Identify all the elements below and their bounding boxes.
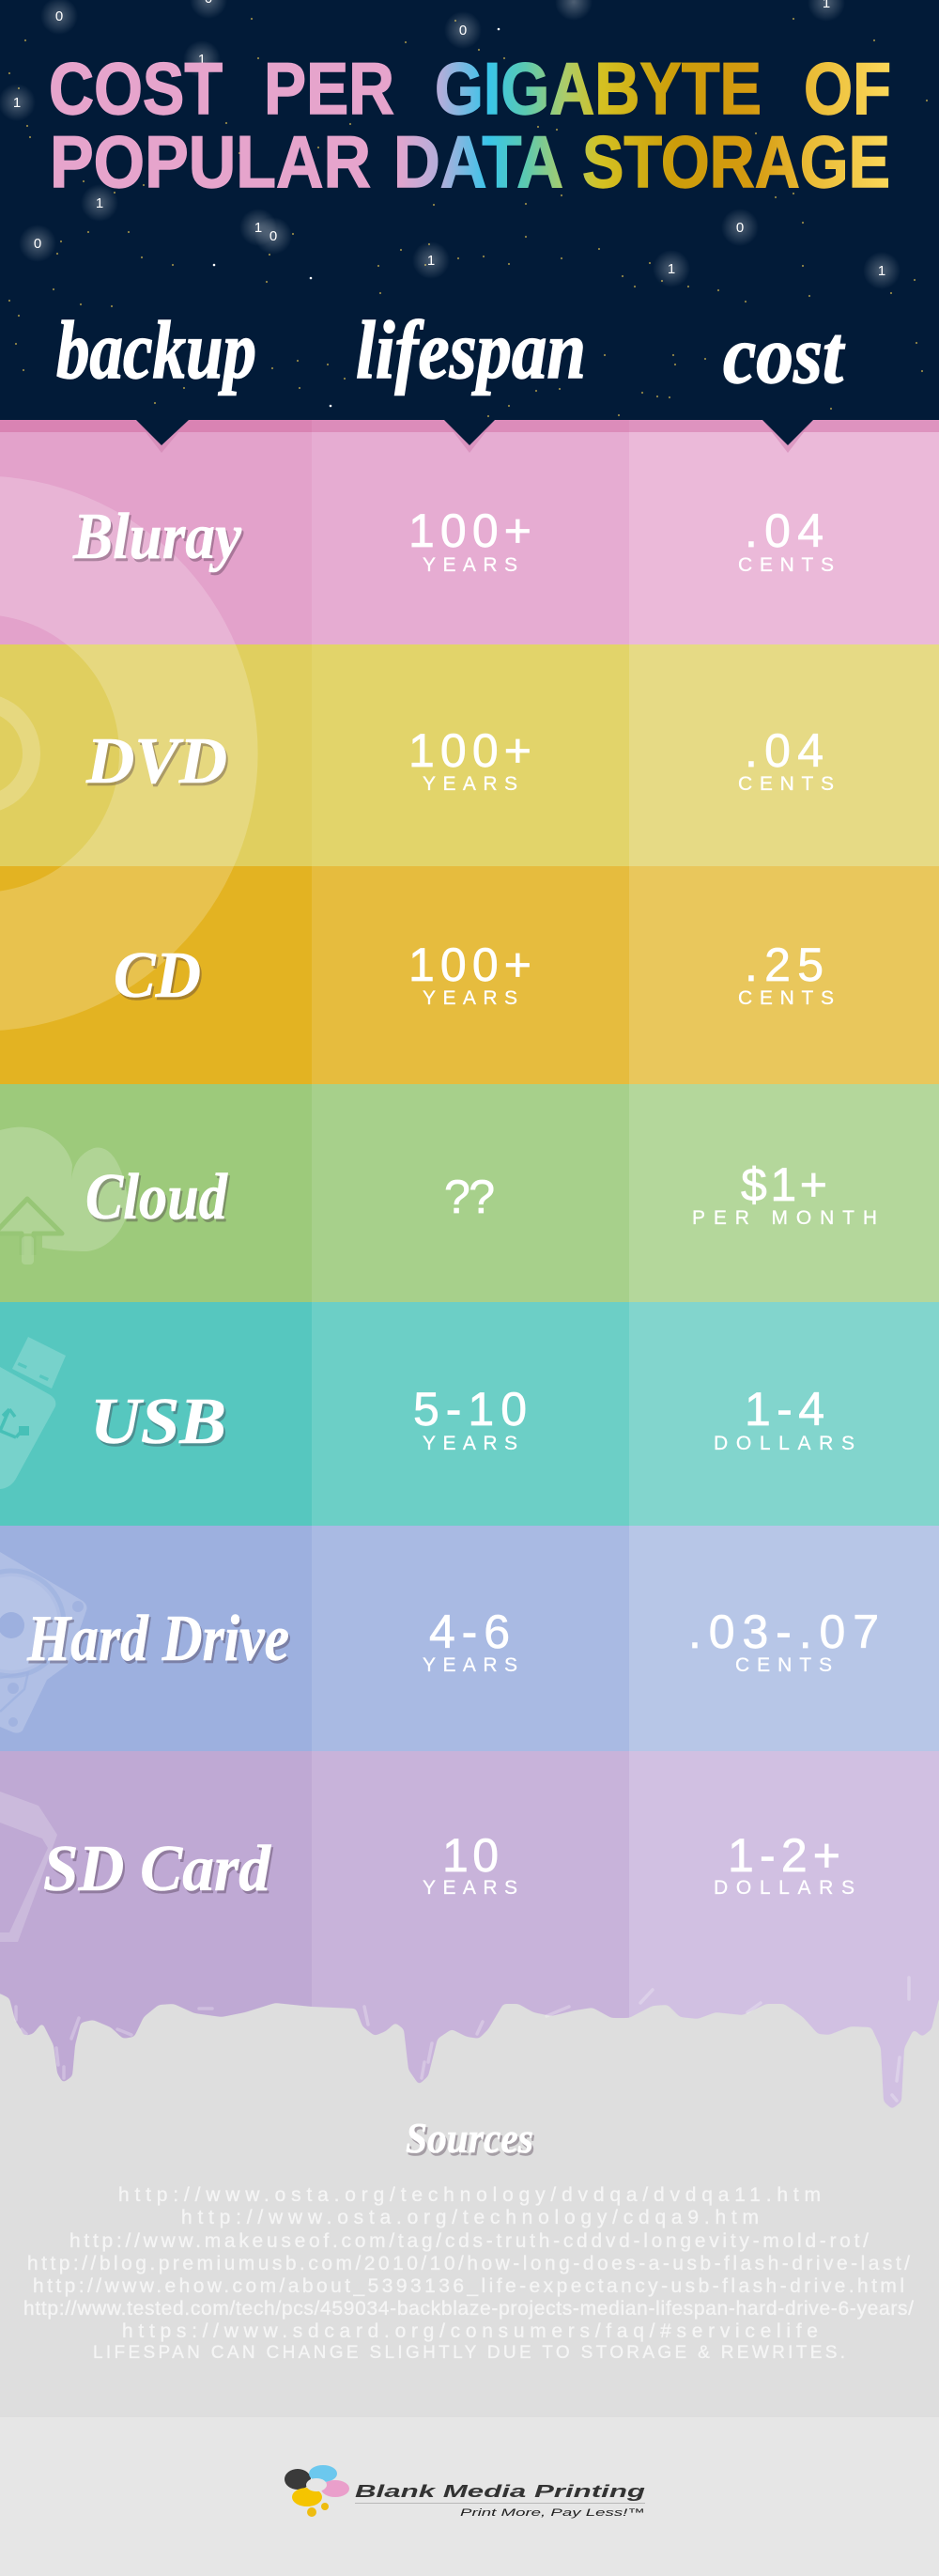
lifespan values: YEARS [423, 1433, 517, 1454]
sources list: http://www.ehow.com/about_5393136_life-expectancy-usb-flash-drive.html [33, 2275, 904, 2297]
column headings: cost [723, 310, 845, 401]
icon: disc [0, 475, 258, 1032]
binary digits: 1 [878, 263, 885, 279]
cost values: CENTS [738, 773, 834, 795]
lifespan values: YEARS [423, 987, 517, 1009]
cost values: .03-.07 [688, 1606, 879, 1658]
sources list: http://www.osta.org/technology/dvdqa/dvdqa11.htm [118, 2184, 821, 2206]
icon: usb drive [0, 1337, 66, 1489]
logo: Blank Media Printing [285, 2465, 645, 2519]
title: COST [49, 47, 223, 130]
media names: CD [114, 939, 201, 1012]
title: GIGABYTE [435, 47, 762, 130]
media names: Hard Drive [26, 1603, 289, 1675]
row: Hard Drive [0, 1526, 939, 1751]
cost values: 1-4 [745, 1383, 824, 1435]
sources list [23, 2184, 914, 2363]
lifespan values: 10 [442, 1829, 499, 1882]
sources list: http://blog.premiumusb.com/2010/10/how-long-does-a-usb-flash-drive-last/ [27, 2253, 910, 2274]
icon: cloud upload [0, 1127, 129, 1265]
cost values: PER MONTH [692, 1207, 877, 1229]
cost values: $1+ [741, 1158, 827, 1211]
starfield [9, 19, 927, 416]
media names: DVD [85, 725, 227, 798]
icon: sd card [0, 1792, 57, 1942]
cost values: CENTS [738, 987, 834, 1009]
lifespan values: 100+ [408, 504, 531, 557]
icon: hard drive [0, 1552, 86, 1733]
lifespan values: YEARS [423, 773, 517, 795]
cost values: CENTS [738, 554, 834, 576]
sources list: http://www.tested.com/tech/pcs/459034-backblaze-projects-median-lifespan-hard-drive-6-years/ [23, 2298, 914, 2320]
title [49, 47, 891, 203]
row: DVD [0, 644, 939, 866]
lifespan values: 100+ [408, 939, 531, 991]
lifespan values: ?? [444, 1171, 495, 1223]
media names: Bluray [72, 501, 242, 573]
column headings: lifespan [356, 305, 586, 396]
row: Bluray [0, 420, 939, 644]
binary digits: 1 [668, 261, 675, 277]
binary digits: 1 [96, 195, 103, 211]
row: USB [0, 1302, 939, 1526]
column headings [56, 305, 845, 401]
media names: USB [90, 1386, 226, 1458]
cost values: 1-2+ [728, 1829, 840, 1882]
cost values: DOLLARS [714, 1877, 854, 1899]
media names: SD Card [43, 1833, 271, 1905]
logo: Blank Media Printing: Print More, Pay Less!™ [460, 2507, 645, 2519]
lifespan values: 100+ [408, 724, 531, 777]
binary digits: 1 [13, 95, 21, 111]
title: POPULAR [50, 120, 371, 203]
sources panel with paint drips [0, 1978, 939, 2443]
binary digits: 1 [427, 253, 435, 269]
binary digits: 1 [198, 52, 206, 68]
sources heading: Sources [406, 2114, 533, 2162]
media names [26, 501, 289, 1905]
sources list: https://www.sdcard.org/consumers/faq/#servicelife [122, 2320, 818, 2342]
binary digits: 0 [459, 23, 467, 39]
sources list: http://www.osta.org/technology/cdqa9.htm [181, 2207, 759, 2228]
binary digits: 1 [254, 220, 262, 236]
row: SD Card [0, 1751, 939, 2127]
row: Cloud [0, 1084, 939, 1302]
cost values: .04 [745, 724, 824, 777]
cost values: CENTS [735, 1654, 832, 1676]
binary digits: 0 [736, 220, 744, 236]
binary digits: 0 [34, 236, 41, 252]
column headings: backup [56, 305, 256, 396]
cost values: DOLLARS [714, 1433, 854, 1454]
footer band [0, 2417, 939, 2576]
lifespan values: YEARS [423, 1877, 517, 1899]
lifespan values: YEARS [423, 554, 517, 576]
lifespan values: 4-6 [429, 1606, 510, 1658]
title: STORAGE [582, 120, 890, 203]
title: DATA [393, 120, 563, 203]
lifespan values: YEARS [423, 1654, 517, 1676]
cost values [688, 504, 879, 1899]
title: PER [264, 47, 394, 130]
sources list: LIFESPAN CAN CHANGE SLIGHTLY DUE TO STORAGE & REWRITES. [93, 2343, 845, 2363]
cost values: .04 [745, 504, 824, 557]
row: CD [0, 866, 939, 1084]
arrow notches [136, 420, 813, 453]
lifespan values: 5-10 [413, 1383, 527, 1435]
logo: Blank Media Printing: Blank Media Printing [355, 2482, 645, 2501]
binary digits: 0 [55, 8, 63, 24]
header background [0, 0, 939, 421]
lifespan values [408, 504, 531, 1899]
title: OF [804, 47, 891, 130]
binary digits [0, 0, 901, 289]
media names: Cloud [85, 1161, 228, 1234]
binary digits: 0 [269, 228, 277, 244]
sources list: http://www.makeuseof.com/tag/cds-truth-cddvd-longevity-mold-rot/ [69, 2230, 869, 2252]
cost values: .25 [745, 939, 824, 991]
